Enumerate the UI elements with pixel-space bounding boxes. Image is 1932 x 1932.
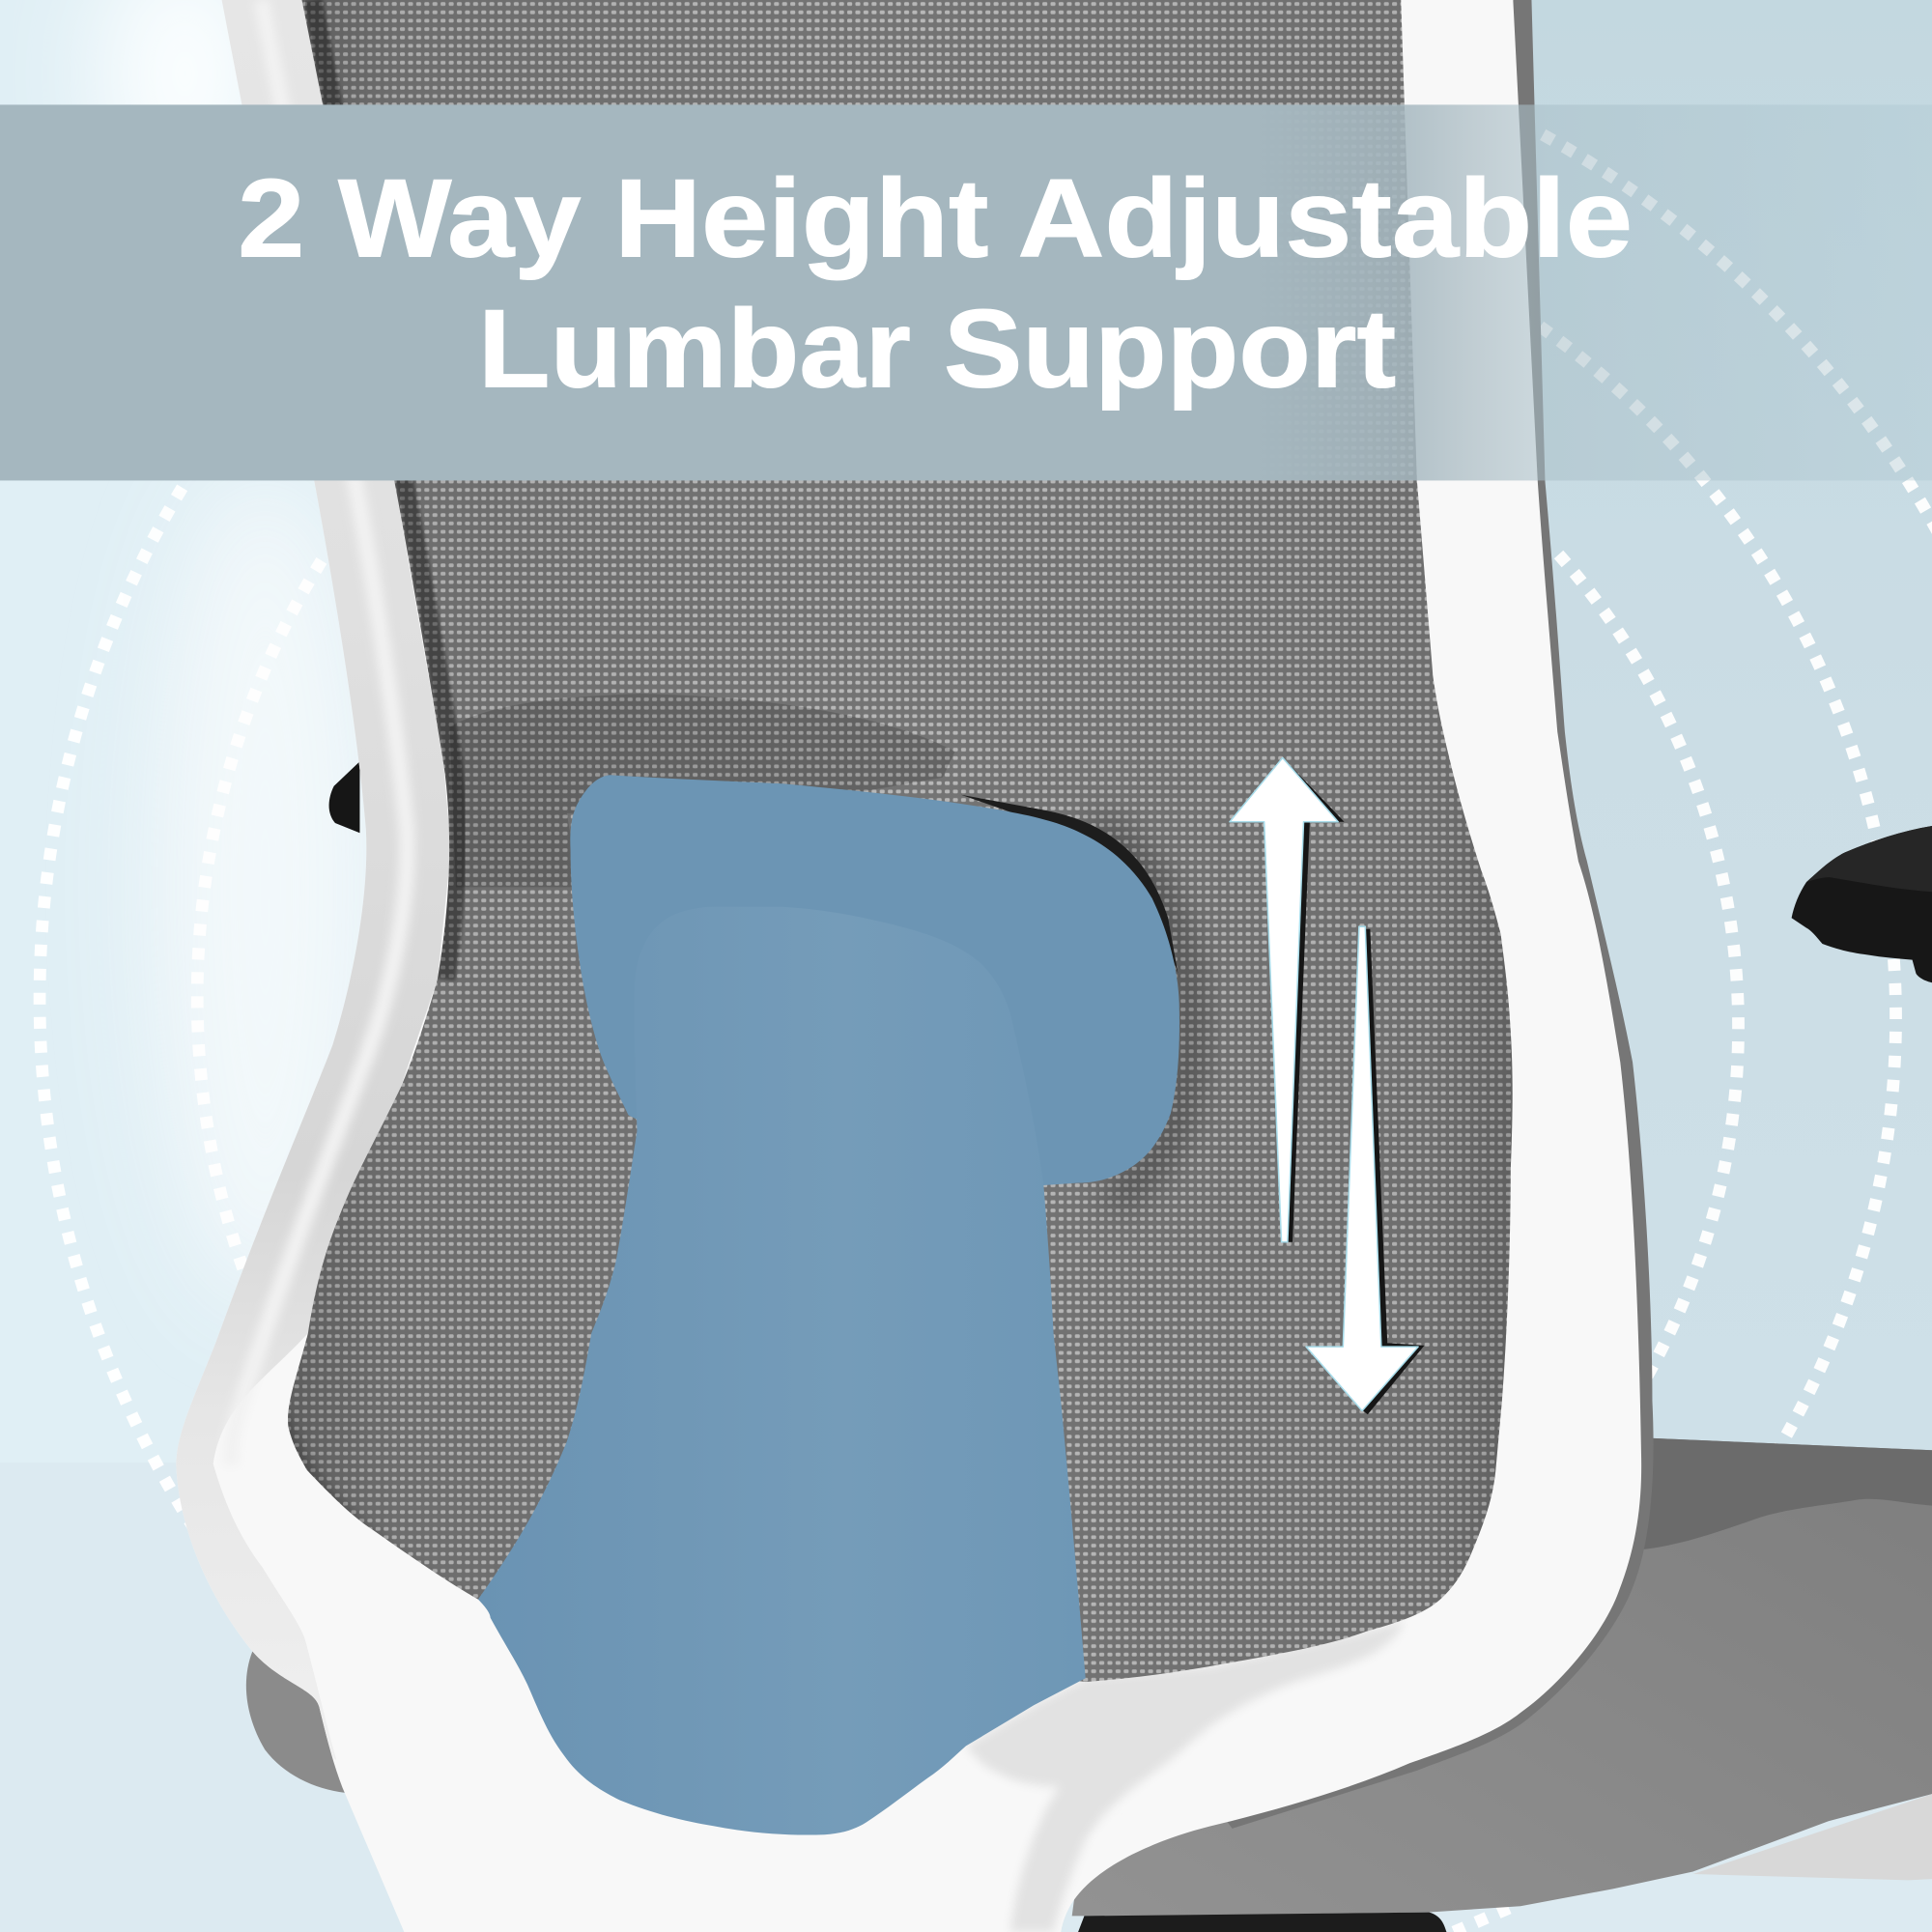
arrow: up bbox=[1230, 757, 1345, 1242]
chair armrest: right bbox=[1792, 826, 1932, 983]
frame lower shading bbox=[966, 1620, 1405, 1932]
white chair frame bbox=[176, 0, 1641, 1932]
lumbar dark backing bbox=[961, 795, 1178, 974]
mesh smudge shadow bbox=[450, 694, 955, 887]
lumbar lower panel bbox=[478, 907, 1086, 1835]
frame left highlight bbox=[231, 0, 407, 1466]
shadow around lumbar wing bbox=[1091, 826, 1189, 1202]
seat lower left bulge bbox=[246, 1651, 370, 1793]
armrest top facet bbox=[1806, 826, 1932, 892]
lumbar support pad bbox=[478, 775, 1179, 1835]
lumbar wing bbox=[570, 775, 1179, 1233]
mesh backrest bbox=[271, 0, 1528, 1725]
seat cushion bbox=[246, 1438, 1932, 1916]
title text bbox=[238, 156, 1633, 412]
arrow: down bbox=[1306, 926, 1424, 1414]
frame left grey section bbox=[176, 0, 451, 1760]
title band bbox=[0, 104, 1932, 480]
title text: 2 Way Height Adjustable bbox=[238, 156, 1633, 280]
chair armrest: left bbox=[329, 761, 359, 833]
mesh dark left edge bbox=[313, 0, 458, 980]
title text: Lumbar Support bbox=[478, 288, 1396, 412]
mesh back edge sliver bbox=[1220, 0, 1654, 1829]
chair base pieces bbox=[1078, 1794, 1932, 1932]
